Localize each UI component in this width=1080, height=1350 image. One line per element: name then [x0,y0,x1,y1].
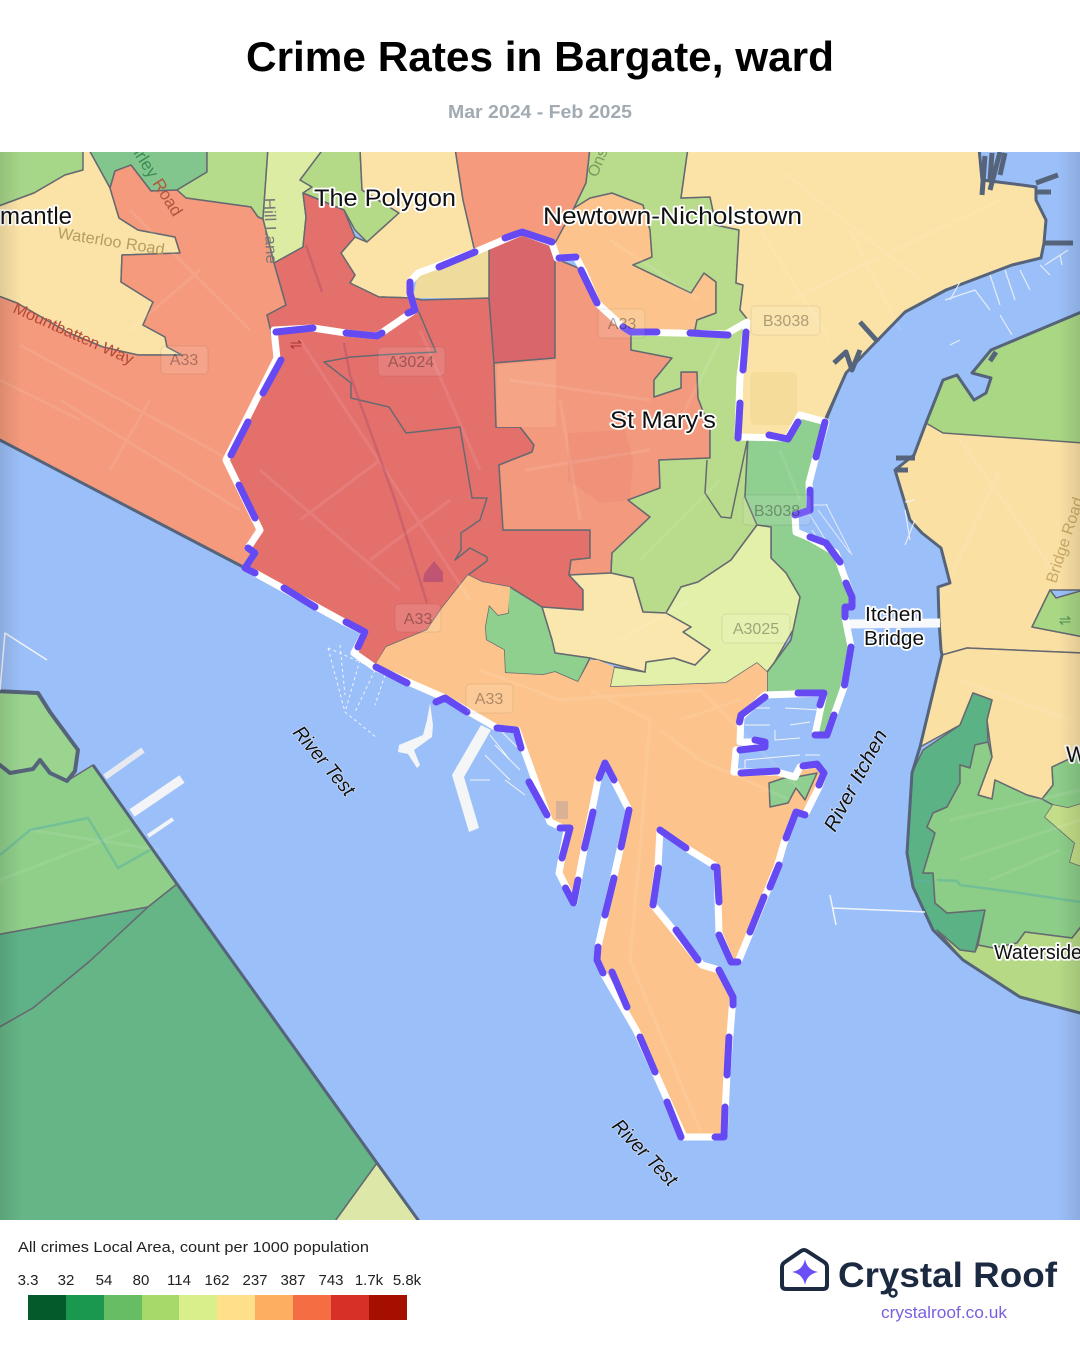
legend value labels: 32 [58,1272,74,1289]
logo y-tail dot [890,1290,896,1296]
street names: Shirley Road [119,127,186,220]
road number labels: A33 [170,352,198,369]
legend value labels: 114 [167,1272,191,1289]
coastlines [0,148,1080,1224]
street names: Onslow [585,123,621,179]
legend value labels: 3.3 [18,1272,38,1289]
legend title: All crimes Local Area, count per 1000 population [18,1239,369,1256]
road number labels: A33 [608,316,636,333]
docks and piers [0,250,1068,925]
purple boundary dashes [231,232,852,1137]
road number labels [161,306,820,713]
place name labels [0,185,1080,964]
street names: Hill Lane [260,198,279,264]
place name labels: Bridge [864,628,924,650]
station icons [290,336,1071,629]
inner neighbourhood lines in the red area [324,310,487,575]
place name labels: Itchen [865,604,922,626]
legend value labels: 743 [318,1272,344,1289]
road number labels: B3038 [754,503,800,520]
river labels: River Test [607,1115,683,1192]
water background [0,152,1080,1220]
railway line through the red area [306,245,427,603]
river labels: River Test [288,722,360,802]
legend value labels [18,1272,422,1289]
river labels [288,722,892,1192]
street texture [0,170,1080,1130]
road number labels: A33 [475,691,503,708]
crime rate areas: ward core [226,193,590,665]
legend value labels: 1.7k [355,1272,384,1289]
crime rate areas: south of the ward [374,575,824,1137]
logo: Crystal Roof [782,1250,1057,1322]
map edge shading [0,152,1080,1220]
crime rate areas: west of the ward [0,148,1080,1224]
white boundary casing [226,232,852,1137]
place name labels: Newtown-Nicholstown [543,203,802,230]
title: Crime Rates in Bargate, ward [246,33,834,80]
legend value labels: 387 [280,1272,306,1289]
station icons: ⇌ [290,336,302,353]
road number labels: B3038 [763,313,809,330]
street names [10,123,1080,585]
river labels: River Itchen [820,726,892,835]
legend value labels: 5.8k [393,1272,422,1289]
Stadium footprint [750,372,797,425]
legend colour scale [28,1295,407,1320]
station icons: ⇌ [1059,612,1071,629]
legend value labels: 162 [204,1272,230,1289]
road number labels: A3025 [733,621,779,638]
place name labels: The Polygon [314,185,456,212]
crime rate areas: far bank of River Test [0,691,78,781]
crime rate areas: east bank [926,311,1080,443]
legend [18,1239,422,1320]
legend value labels: 237 [242,1272,268,1289]
Itchen Bridge road [848,623,940,624]
place name labels: St Mary's [610,407,716,434]
street names: Mountbatten Way [10,300,136,369]
legend value labels: 80 [133,1272,149,1289]
stream lines [0,818,1080,902]
ward boundary: Bargate [226,232,852,1137]
road number labels: A33 [404,611,432,628]
logo wordmark: Crystal Roof [838,1256,1057,1295]
street names: Waterloo Road [56,225,166,259]
park blob near the railway [423,561,443,582]
road number labels: A3024 [388,354,434,371]
legend value labels: 54 [96,1272,112,1289]
logo url: crystalroof.co.uk [881,1304,1008,1322]
subtitle: date range: Mar 2024 - Feb 2025 [448,102,632,122]
icon: house with star [782,1250,827,1289]
